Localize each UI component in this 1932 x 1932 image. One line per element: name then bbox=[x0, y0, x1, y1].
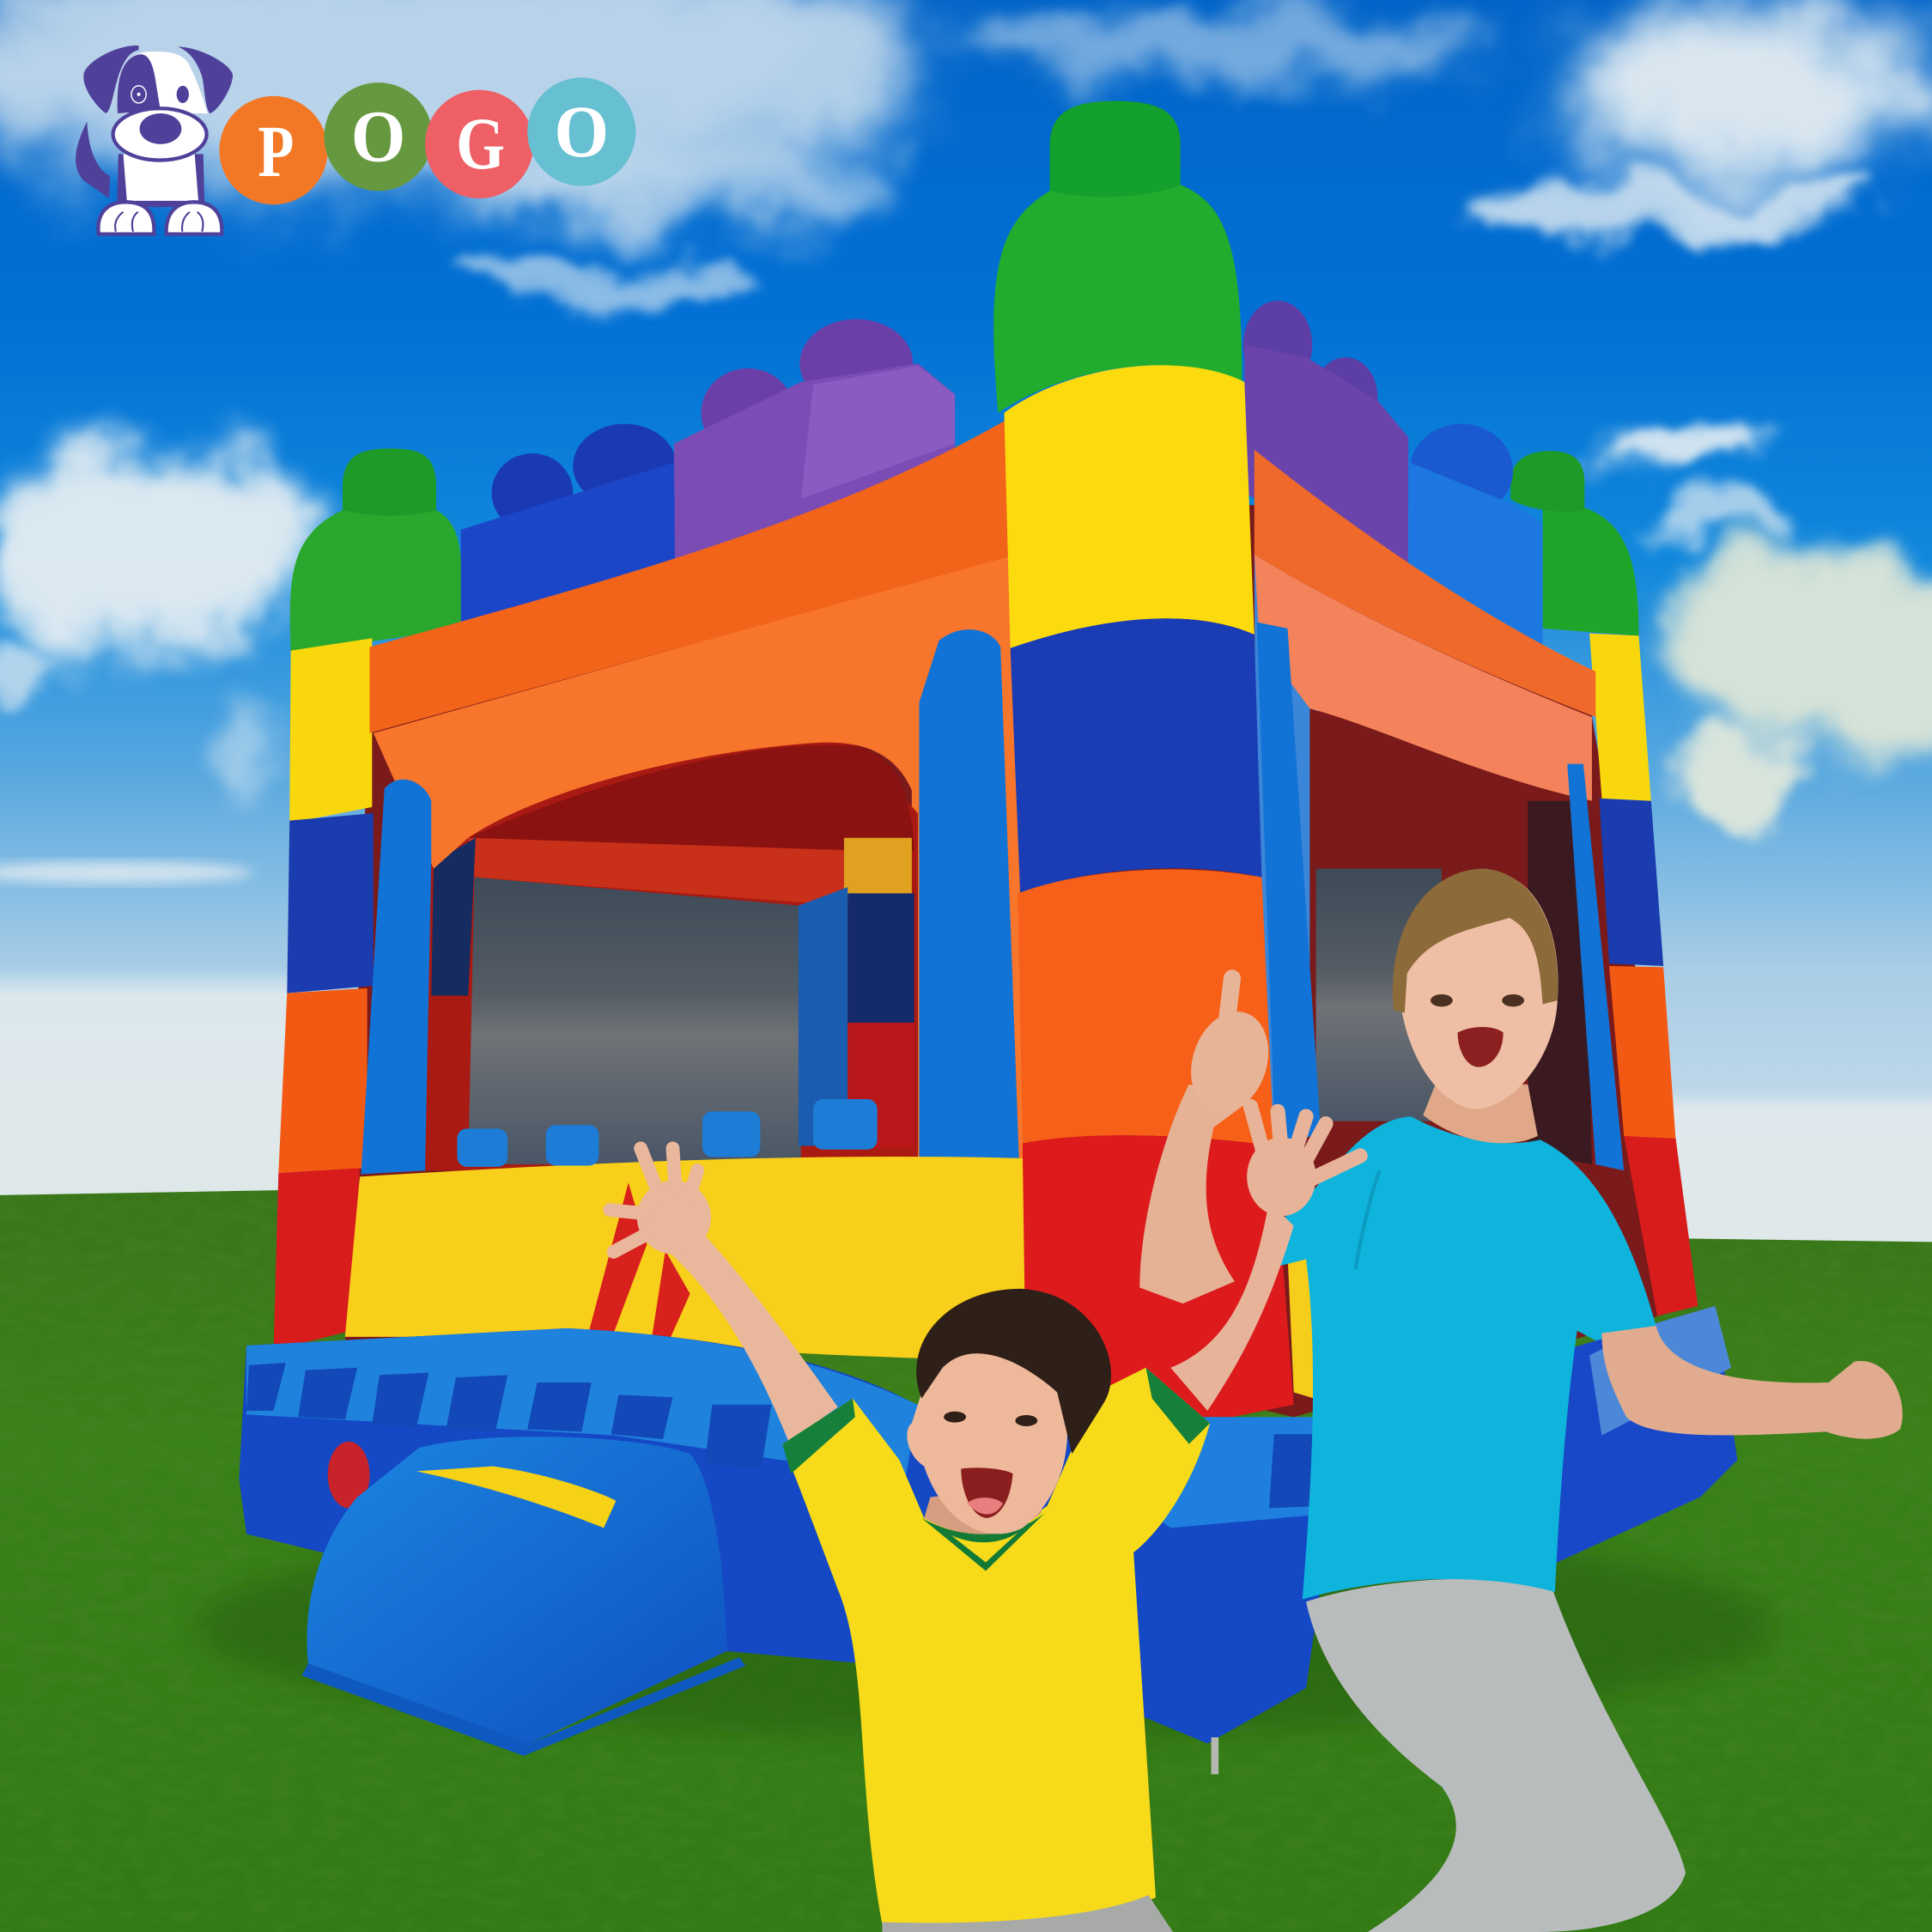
horizon haze right bbox=[1651, 1091, 1932, 1250]
dog ears bbox=[83, 46, 139, 113]
red door straps bbox=[586, 1183, 690, 1349]
base leg bbox=[1212, 1737, 1218, 1774]
dog head bbox=[118, 52, 208, 113]
dog paws bbox=[98, 202, 154, 234]
window cushions bbox=[457, 1099, 878, 1167]
letter O teal: O bbox=[554, 91, 609, 173]
dog body bbox=[117, 154, 204, 207]
cyan t-shirt bbox=[1277, 1116, 1656, 1600]
clouds bbox=[0, 0, 1932, 839]
backing bbox=[345, 493, 1694, 1417]
open mouth bbox=[961, 1467, 1013, 1518]
letter G bbox=[425, 90, 533, 198]
neck bbox=[1423, 1084, 1538, 1143]
grey jeans bbox=[1306, 1579, 1686, 1932]
head bbox=[1399, 872, 1558, 1109]
right arm bbox=[1601, 1326, 1903, 1439]
letter O green: O bbox=[351, 95, 405, 178]
neck bbox=[924, 1485, 1048, 1534]
horizon haze left bbox=[0, 967, 295, 1207]
dog tail bbox=[76, 122, 110, 198]
boy in yellow shirt bbox=[610, 1148, 1210, 1932]
boy in blue shirt bbox=[1139, 869, 1903, 1932]
top blocks left bbox=[461, 319, 955, 653]
interior bbox=[425, 708, 1592, 1170]
eyes bbox=[944, 1412, 1037, 1426]
head bbox=[907, 1350, 1067, 1534]
yellow shirt bbox=[782, 1368, 1210, 1928]
bounce house bbox=[197, 101, 1774, 1774]
dog muzzle bbox=[113, 108, 207, 161]
main center tower bbox=[993, 101, 1294, 1417]
base window squares bbox=[246, 1363, 1328, 1508]
hair bbox=[916, 1289, 1111, 1454]
blue side pillars bbox=[361, 623, 1624, 1175]
grey trousers bbox=[882, 1895, 1173, 1932]
orange roof right bbox=[1255, 450, 1595, 801]
top blocks right bbox=[1243, 301, 1543, 653]
dog eyes bbox=[131, 86, 146, 103]
bottom base front bbox=[714, 1468, 862, 1651]
letter O green bbox=[324, 82, 433, 191]
dog mascot bbox=[76, 46, 233, 234]
shadow bbox=[197, 1516, 1774, 1737]
entry ramp bbox=[302, 1437, 745, 1756]
letter P: P bbox=[258, 111, 294, 192]
yellow front wall bbox=[345, 1157, 1355, 1411]
letter G: G bbox=[456, 103, 505, 185]
grass field bbox=[0, 1183, 1932, 1932]
streak cloud bbox=[0, 861, 252, 884]
inflatable base bbox=[239, 1306, 1737, 1743]
left raised hand arm bbox=[1170, 1107, 1360, 1411]
sky background bbox=[0, 0, 1932, 1250]
right corner tower bbox=[1510, 451, 1698, 1316]
raised arm bbox=[1139, 978, 1281, 1303]
logo bbox=[76, 46, 635, 234]
warning sign bbox=[328, 1442, 369, 1508]
left corner tower bbox=[274, 448, 462, 1351]
letter P bbox=[219, 96, 328, 204]
letter O teal bbox=[527, 77, 635, 186]
hair bbox=[1393, 869, 1558, 1013]
orange roof left bbox=[369, 419, 1013, 869]
raised left arm bbox=[610, 1148, 838, 1442]
open mouth bbox=[1458, 1027, 1504, 1067]
eyes bbox=[1431, 994, 1524, 1006]
